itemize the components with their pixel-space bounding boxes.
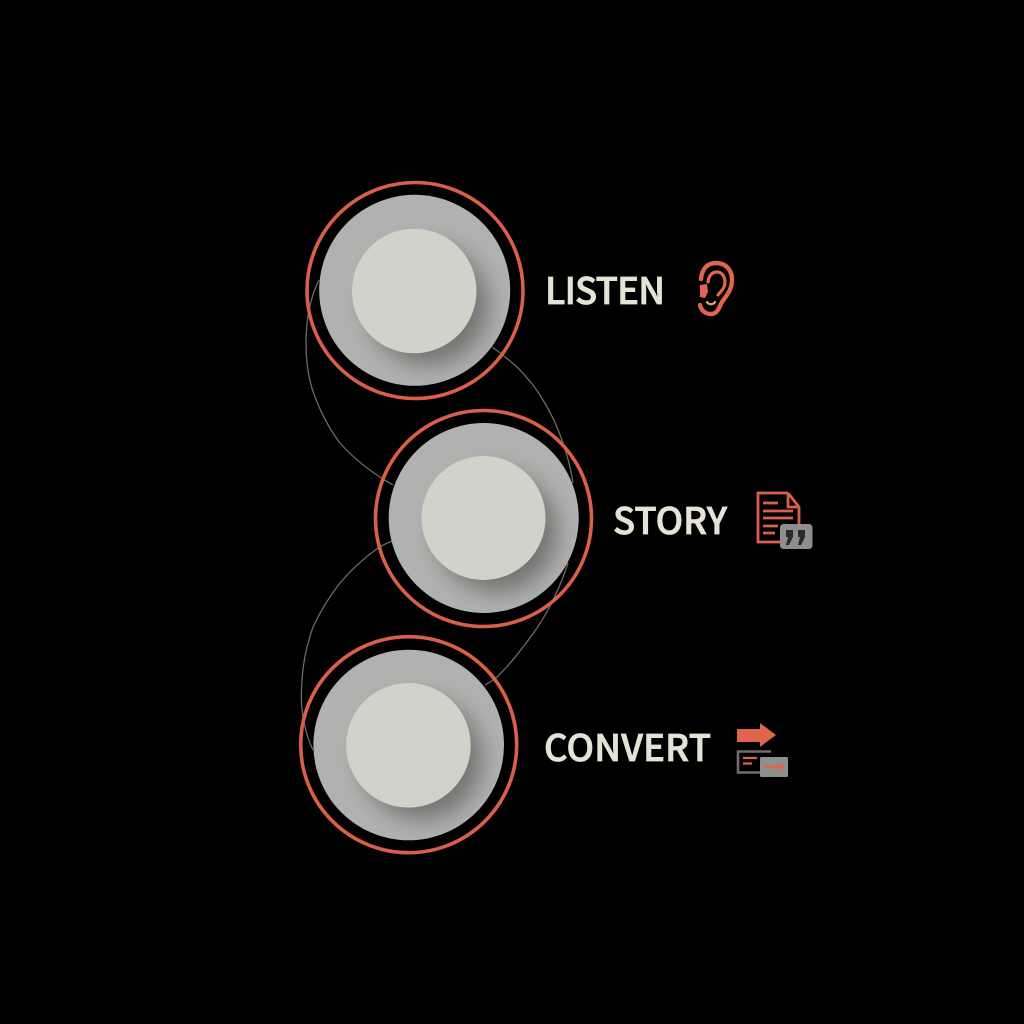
icon: document with quote bubble [758,493,812,549]
node: convert circle [301,637,517,853]
label: story: STORY [613,492,728,545]
icon: ear [700,263,732,314]
icon: arrow and cards [737,723,788,777]
connector: curved lines between the nodes [301,280,573,750]
label: convert: CONVERT [544,719,711,772]
label: listen: LISTEN [545,262,665,315]
node: story circle [376,410,592,626]
node: listen circle [307,182,523,398]
